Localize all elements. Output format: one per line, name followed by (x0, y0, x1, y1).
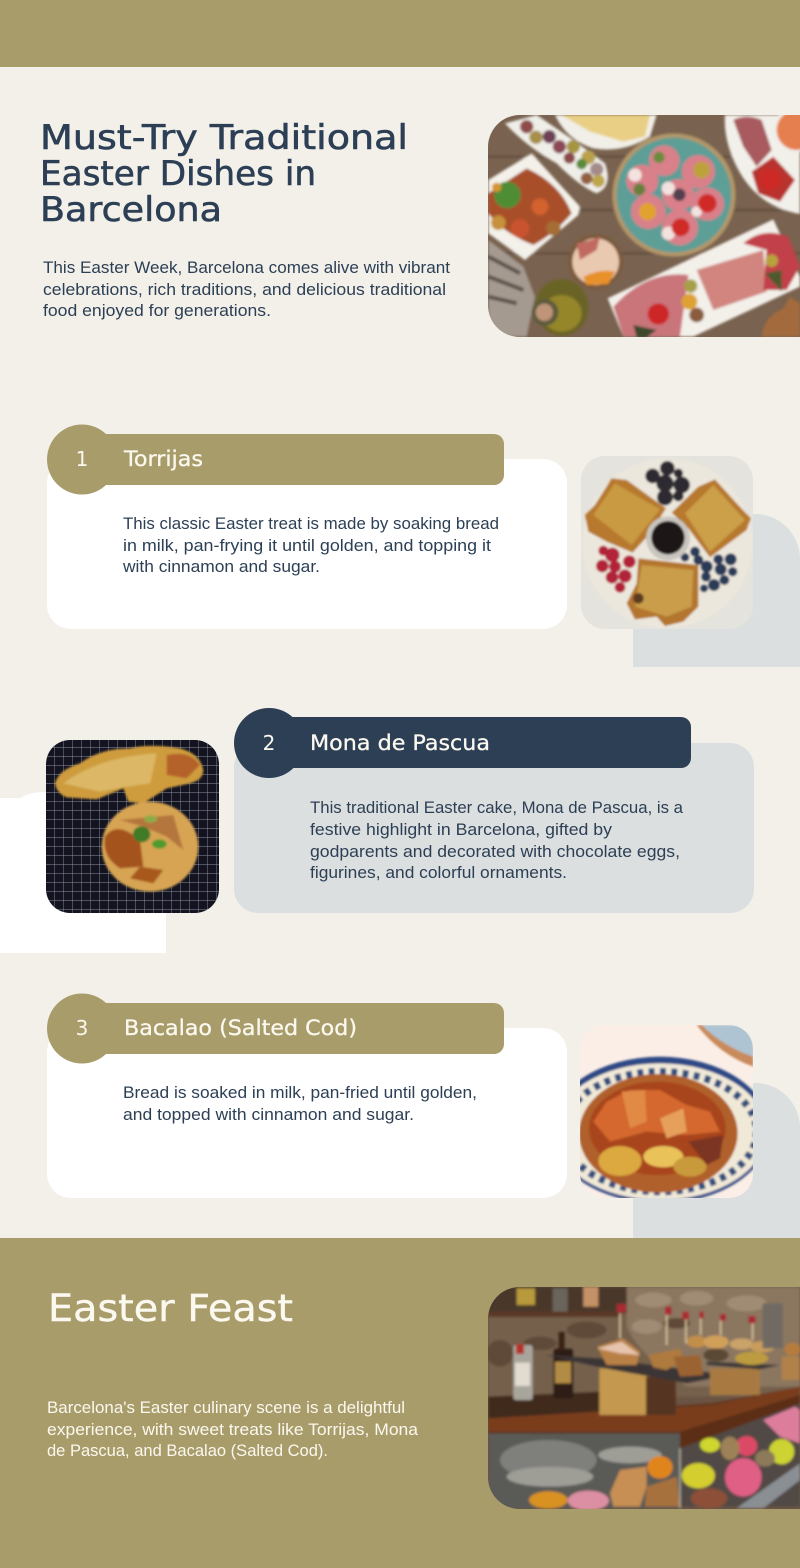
top band (0, 0, 800, 67)
text 2 (310, 799, 684, 882)
text 3 (123, 1084, 477, 1124)
intro text: celebrations, rich traditions, and delicious traditional (43, 281, 446, 299)
text 3: and topped with cinnamon and sugar. (123, 1106, 414, 1124)
title: Must-Try Traditional (40, 118, 408, 158)
intro text: food enjoyed for generations. (43, 302, 271, 320)
text 1: This classic Easter treat is made by soaking bread (123, 515, 499, 533)
panel: step 3 Bacalao (47, 994, 567, 1198)
intro text: This Easter Week, Barcelona comes alive with vibrant (43, 259, 450, 277)
header bar 1 (78, 434, 504, 485)
number badge 3: 3 (76, 1016, 88, 1040)
text 1 (122, 515, 499, 576)
text 2: figurines, and colorful ornaments. (310, 864, 567, 882)
photo: torrijas plate (581, 456, 753, 629)
number badge 3 (47, 994, 117, 1064)
footer text: de Pascua, and Bacalao (Salted Cod). (47, 1442, 328, 1460)
photo: tapas bar (487, 1287, 800, 1511)
text 2: festive highlight in Barcelona, gifted by (310, 821, 613, 839)
footer text: Barcelona's Easter culinary scene is a delightful (47, 1399, 405, 1417)
title (40, 118, 408, 230)
footer band (0, 1238, 800, 1568)
heading 2: Mona de Pascua (310, 731, 490, 755)
number badge 2 (234, 708, 304, 778)
heading 1: Torrijas (123, 447, 203, 471)
header bar 2 (265, 717, 691, 768)
photo: mona de pascua (46, 740, 219, 913)
text 2: This traditional Easter cake, Mona de Pascua, is a (310, 799, 684, 817)
footer text (47, 1399, 419, 1460)
title: Barcelona (40, 190, 222, 230)
heading 3: Bacalao (Salted Cod) (124, 1016, 357, 1040)
title: Easter Dishes in (40, 154, 316, 194)
number badge 1 (47, 424, 117, 494)
decorative block 2 (0, 792, 166, 953)
text 2: godparents and decorated with chocolate eggs, (310, 843, 680, 861)
number badge 1: 1 (76, 447, 88, 471)
decorative block 3 (633, 1083, 800, 1238)
intro text (43, 259, 450, 320)
footer heading: Easter Feast (48, 1287, 293, 1330)
header bar 3 (78, 1003, 504, 1054)
footer text: experience, with sweet treats like Torrijas, Mona (47, 1421, 419, 1439)
photo: bacalao dish (580, 1025, 753, 1198)
card 3 (47, 1028, 567, 1198)
number badge 2: 2 (263, 731, 275, 755)
panel: step 1 Torrijas (47, 424, 567, 629)
card 2 (234, 743, 754, 913)
card 1 (47, 459, 567, 629)
photo: tapas table (480, 107, 800, 337)
text 1: in milk, pan-frying it until golden, and topping it (123, 537, 491, 555)
panel: step 2 Mona de Pascua (234, 708, 754, 913)
text 3: Bread is soaked in milk, pan-fried until golden, (123, 1084, 477, 1102)
text 1: with cinnamon and sugar. (122, 558, 320, 576)
decorative block 1 (633, 514, 800, 667)
